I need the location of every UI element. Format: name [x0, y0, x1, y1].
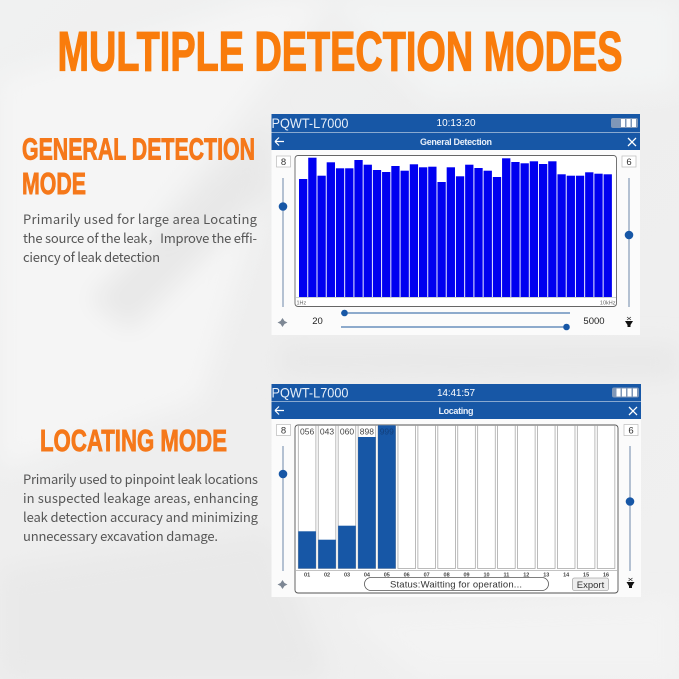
channel bar chart: 02: [324, 572, 330, 578]
channel bar chart: 14: [563, 572, 570, 578]
channel bar chart: 08: [444, 572, 450, 578]
text block: locating description: in suspected leakage areas, enhancing: [23, 488, 259, 507]
text block: locating description: Primarily used to pinpoint leak locations: [23, 469, 258, 488]
text block: locating description: unnecessary excavation damage.: [23, 526, 218, 545]
icon: speaker mute: [625, 317, 633, 327]
status bar: 10:13:20: [436, 118, 476, 129]
text block: general detection description: Primarily used for large area Locating: [23, 209, 258, 228]
left gain slider: 8: [281, 426, 286, 436]
spectrum bar chart: [295, 156, 616, 306]
export button: Export: [577, 580, 605, 591]
channel bar chart: 13: [543, 572, 549, 578]
channel bar chart: 06: [404, 572, 410, 578]
text block: locating description: leak detection accuracy and minimizing: [23, 507, 259, 526]
icon: speaker mute: [626, 578, 634, 588]
icon: gain: [278, 318, 288, 327]
channel bar chart: 999: [380, 426, 394, 436]
panel: locating text: [23, 423, 259, 545]
title bar: [272, 132, 640, 150]
title bar: [272, 402, 641, 419]
channel bar chart: 043: [320, 426, 334, 436]
heading: general detection mode: [22, 132, 255, 201]
right volume slider: [622, 156, 636, 307]
channel bar chart: 12: [523, 572, 529, 578]
status bar: PQWT-L7000: [272, 115, 349, 131]
frequency range sliders: [312, 310, 605, 330]
panel: general detection text: [22, 132, 258, 266]
left gain slider: 8: [281, 157, 286, 168]
text block: general detection description: the source of the leak，Improve the effi-: [23, 228, 257, 247]
export button: [572, 578, 608, 591]
channel bar chart: 16: [603, 572, 609, 578]
status bar: [272, 384, 641, 401]
heading: general detection mode: GENERAL DETECTION: [22, 132, 255, 166]
status message: [364, 578, 548, 590]
panel: locating screen: [272, 384, 641, 597]
status bar: [272, 114, 640, 132]
panel: general detection screen: [272, 114, 640, 335]
channel bar chart: 05: [384, 572, 390, 578]
icon: gain: [278, 580, 288, 589]
status bar: PQWT-L7000: [272, 384, 349, 400]
channel bar chart: 10: [483, 572, 490, 578]
right volume slider: [624, 424, 638, 571]
heading: locating mode: LOCATING MODE: [40, 423, 227, 458]
frequency range sliders: 20: [312, 316, 323, 327]
channel bar chart: 060: [340, 426, 354, 436]
heading: general detection mode: MODE: [22, 166, 86, 201]
channel bar chart: 11: [503, 572, 509, 578]
spectrum bar chart: 10kHz: [600, 300, 616, 306]
channel bar chart: 07: [424, 572, 430, 578]
channel bar chart: 09: [463, 572, 470, 578]
channel bar chart: [295, 425, 618, 593]
channel bar chart: 01: [304, 572, 310, 578]
channel bar chart: 15: [583, 572, 589, 578]
right volume slider: 6: [628, 426, 634, 436]
right volume slider: 6: [626, 157, 632, 168]
channel bar chart: 03: [344, 572, 350, 578]
status bar: 14:41:57: [437, 388, 475, 399]
left gain slider: [276, 424, 290, 571]
text block: locating description: [23, 469, 259, 545]
left gain slider: [276, 156, 290, 307]
channel bar chart: 056: [300, 426, 314, 436]
spectrum bar chart: 1Hz: [296, 300, 307, 306]
text block: general detection description: ciency of leak detection: [23, 247, 160, 266]
status message: Status:Waitting for operation...: [390, 580, 522, 590]
channel bar chart: 04: [364, 572, 371, 578]
title bar: General Detection: [420, 137, 492, 147]
channel bar chart: 898: [360, 426, 374, 436]
title bar: Locating: [438, 406, 474, 416]
text block: general detection description: [23, 209, 258, 266]
frequency range sliders: 5000: [583, 316, 605, 327]
